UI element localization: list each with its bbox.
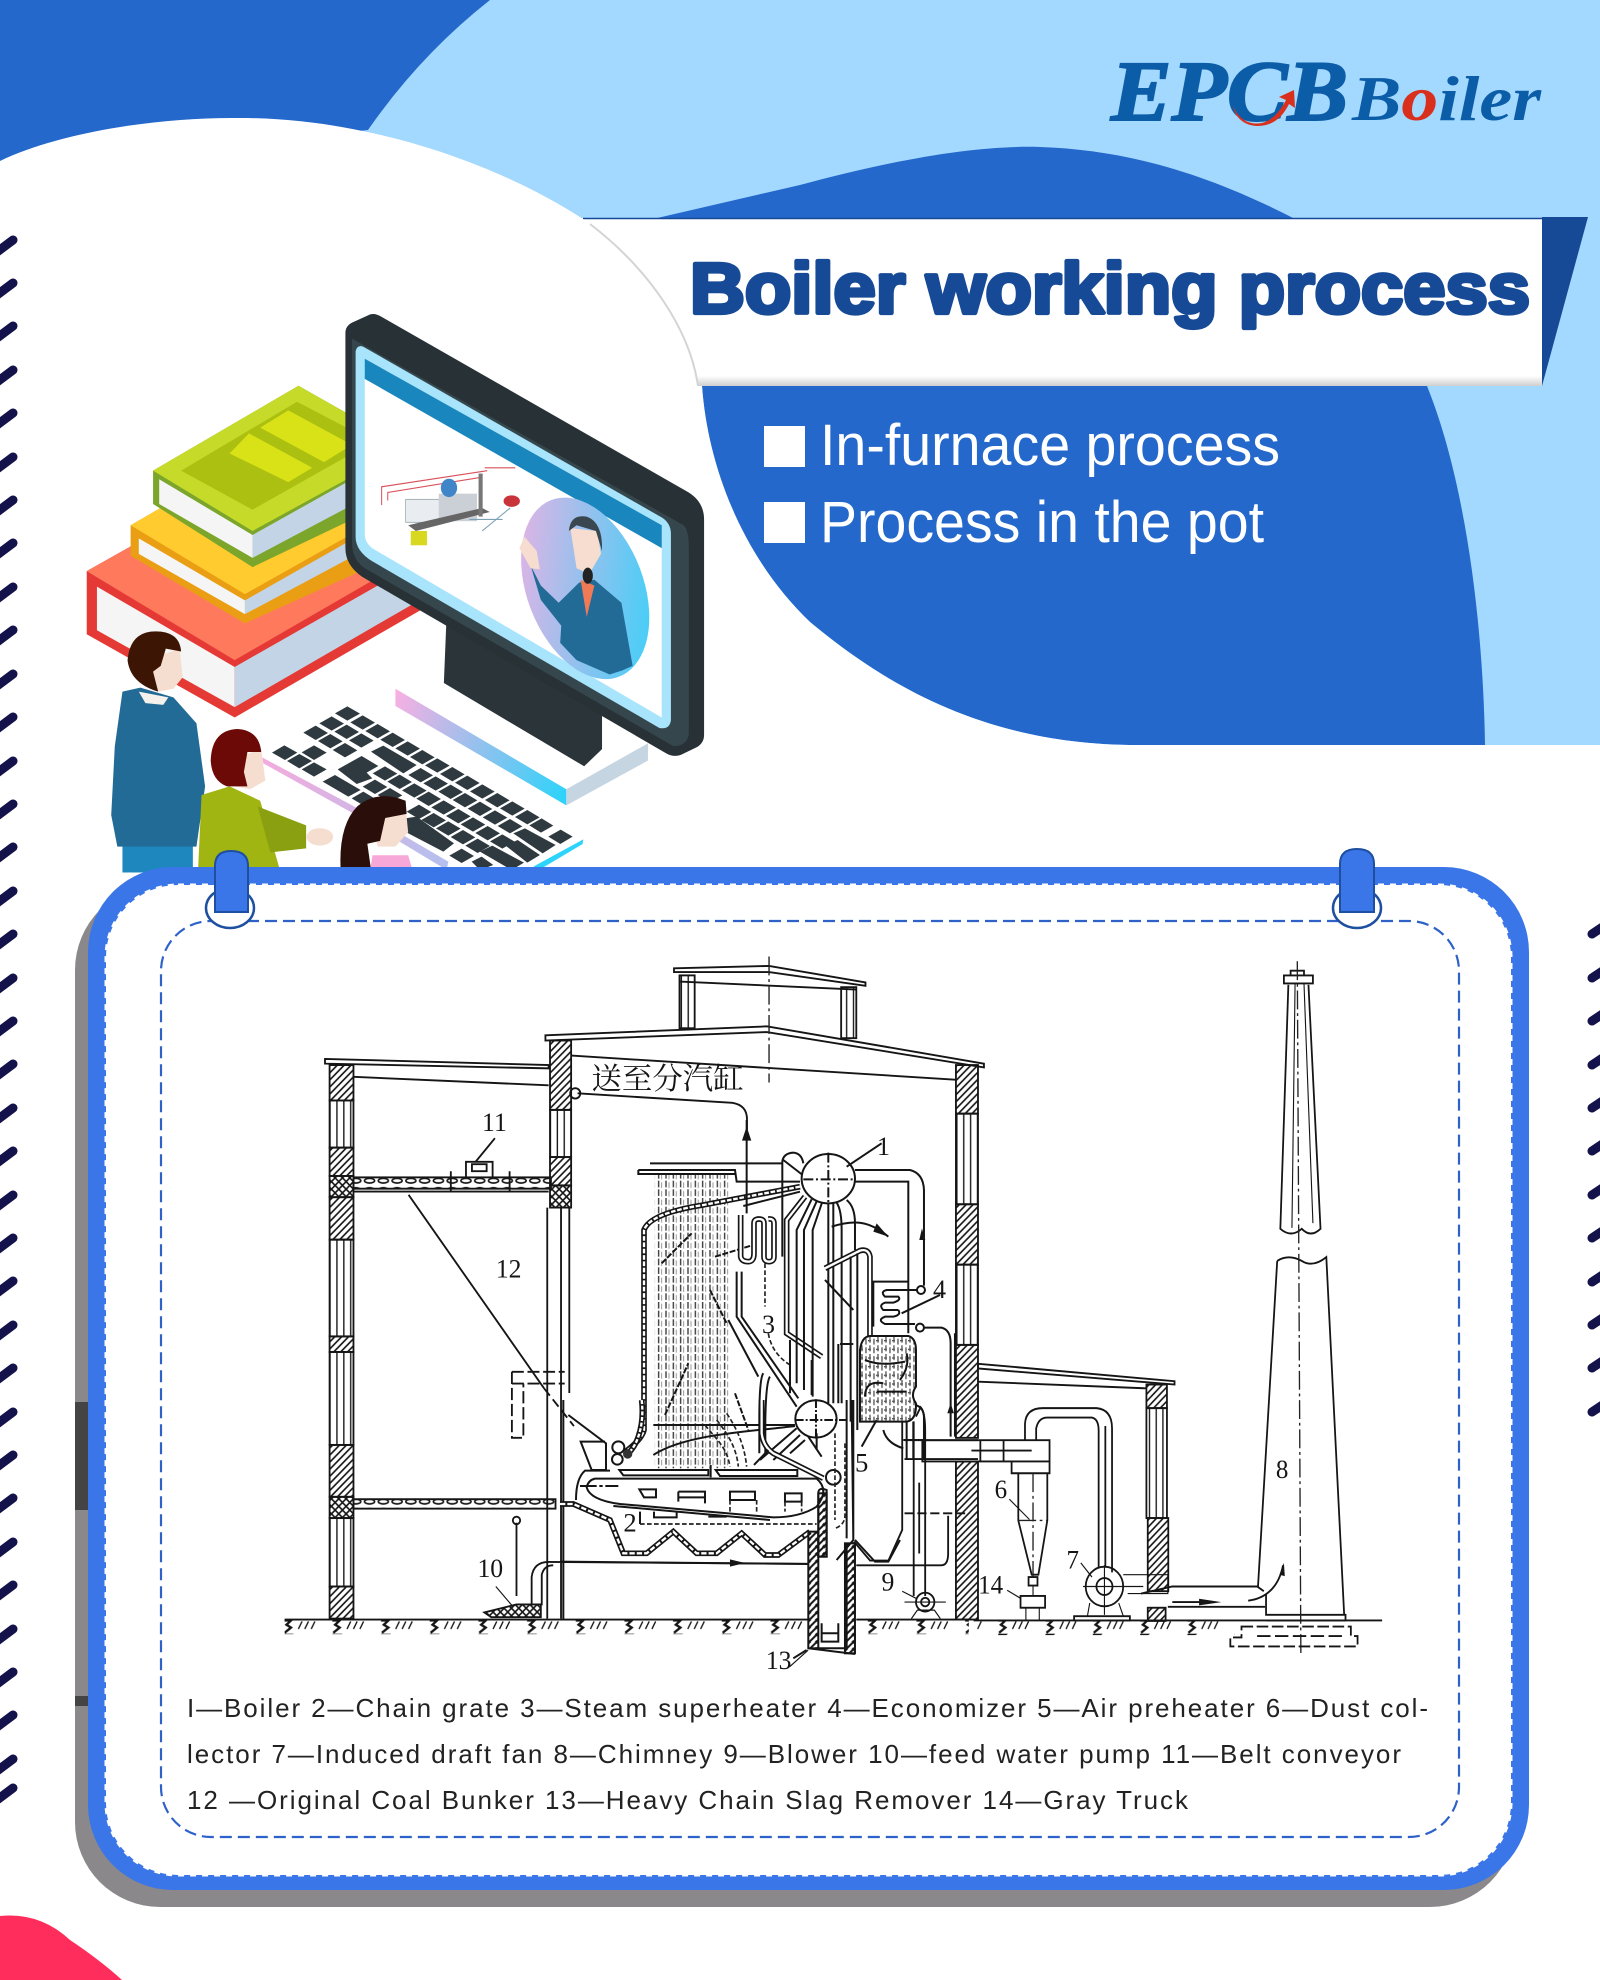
- title band: [560, 217, 1588, 386]
- illustration: people: [111, 631, 413, 872]
- left building: [325, 1059, 574, 1619]
- icon: monitor stand: [444, 620, 602, 766]
- icon: keyboard: [262, 706, 583, 870]
- labels: numbers in main building: 9: [882, 1567, 894, 1596]
- left edge notebook marks: [0, 240, 13, 1800]
- double pipe to header: [754, 1400, 845, 1557]
- list item: In-furnace process: In-furnace process: [820, 413, 1280, 478]
- chimney: [974, 961, 1382, 1655]
- icon: monitor base: [395, 689, 648, 805]
- induced draft fan: [1074, 1563, 1168, 1620]
- economizer: [855, 1170, 955, 1437]
- main building shell: [545, 957, 984, 1620]
- air preheater: [860, 1336, 924, 1460]
- water wall tube: [623, 1187, 800, 1453]
- labels: numbers 1, 3 and 4: 1: [877, 1132, 890, 1161]
- furnace tubes: [638, 1163, 800, 1468]
- icon: mini boiler on screen: [382, 468, 520, 545]
- chain grate: [576, 1465, 823, 1524]
- logo: EPCB Boiler: Boiler: [1351, 63, 1542, 134]
- icon: girl: [340, 796, 413, 872]
- list item: Process in the pot: Process in the pot: [820, 490, 1264, 555]
- slag pit: [793, 1400, 900, 1658]
- feed water line: [560, 1559, 808, 1567]
- drum 1: [802, 1143, 882, 1203]
- logo: EPCB Boiler: [1110, 43, 1542, 139]
- superheater loops: [728, 1215, 798, 1407]
- right edge notebook marks: [1592, 926, 1600, 1412]
- illustration: books, monitor and screen: [87, 314, 704, 805]
- legend text: lector 7—Induced draft fan 8—Chimney 9—Blower 10—feed water pump 11—Belt conveyor: [187, 1739, 1401, 1769]
- background: light blue header: [0, 0, 1600, 745]
- labels: numbers in right section: [978, 1454, 1288, 1600]
- legend text: I—Boiler 2—Chain grate 3—Steam superheater 4—Economizer 5—Air preheater 6—Dust col-: [187, 1693, 1428, 1723]
- icon: red book: [87, 465, 423, 718]
- feed pipe and air duct: [532, 1407, 978, 1667]
- heading: Boiler working process: [690, 250, 1530, 329]
- labels: numbers in core: 5: [855, 1448, 868, 1478]
- chart: boiler house schematic, main building: [285, 957, 984, 1675]
- icon: monitor: [345, 314, 704, 756]
- convection tube bank: [782, 1153, 888, 1430]
- icon: right clip: [1333, 849, 1381, 928]
- steam pipe with label: [570, 1063, 747, 1138]
- chart: boiler core, drums and tube bank: [623, 1120, 955, 1468]
- labels: numbers in right section: 7: [1067, 1545, 1079, 1575]
- labels: numbers 1, 3 and 4: 3: [762, 1310, 775, 1339]
- logo: EPCB Boiler: EPCB: [1110, 43, 1348, 139]
- chart: boiler house schematic, dust collector and chimney: [922, 961, 1382, 1655]
- labels: numbers in right section: 6: [995, 1474, 1007, 1504]
- decorative pink corner: [0, 1916, 122, 1980]
- chart: boiler core, chain grate and slag pit: [560, 1400, 900, 1658]
- labels: numbers in main building: 10: [477, 1554, 503, 1583]
- icon: presenter portrait: [495, 473, 675, 703]
- icon: green book: [153, 386, 352, 567]
- steam pipe arrow: [742, 1120, 751, 1213]
- icon: left clip: [206, 851, 254, 928]
- labels: numbers in main building: 13: [766, 1646, 792, 1675]
- drum 2: [653, 1373, 847, 1467]
- dust collector: [922, 1408, 1112, 1620]
- coal hopper: [563, 1400, 642, 1620]
- labels: numbers in main building: [477, 1108, 894, 1675]
- labels: numbers in main building: 12: [496, 1254, 522, 1283]
- icon: yellow book: [131, 459, 367, 623]
- dark blue main shape: [702, 386, 1485, 745]
- legend text: 12 —Original Coal Bunker 13—Heavy Chain Slag Remover 14—Gray Truck: [187, 1785, 1189, 1815]
- panel shadow: [75, 885, 1515, 1907]
- band shadow along blob edge: [590, 224, 698, 386]
- legend text: [187, 1693, 1428, 1815]
- labels: numbers in core: 2: [623, 1508, 637, 1538]
- steam pipe with label: 送至分汽缸: [591, 1063, 744, 1096]
- ash hopper: [560, 1504, 810, 1555]
- labels: numbers 1, 3 and 4: [762, 1132, 946, 1339]
- panel: diagram card: [75, 867, 1529, 1907]
- shed: [978, 1364, 1175, 1621]
- icon: boy: [198, 729, 333, 872]
- icon: man: [111, 631, 205, 872]
- labels: numbers in right section: 8: [1276, 1454, 1288, 1484]
- labels: numbers in core: [623, 1448, 868, 1538]
- labels: numbers in right section: 14: [978, 1570, 1003, 1600]
- labels: numbers in main building: 11: [482, 1108, 507, 1137]
- flue duct: [1141, 1563, 1285, 1607]
- ground line: [285, 1620, 969, 1634]
- background: dark blue bump behind title: [640, 147, 1297, 222]
- labels: numbers 1, 3 and 4: 4: [933, 1275, 946, 1304]
- background: dark blue top-left shape: [0, 0, 490, 170]
